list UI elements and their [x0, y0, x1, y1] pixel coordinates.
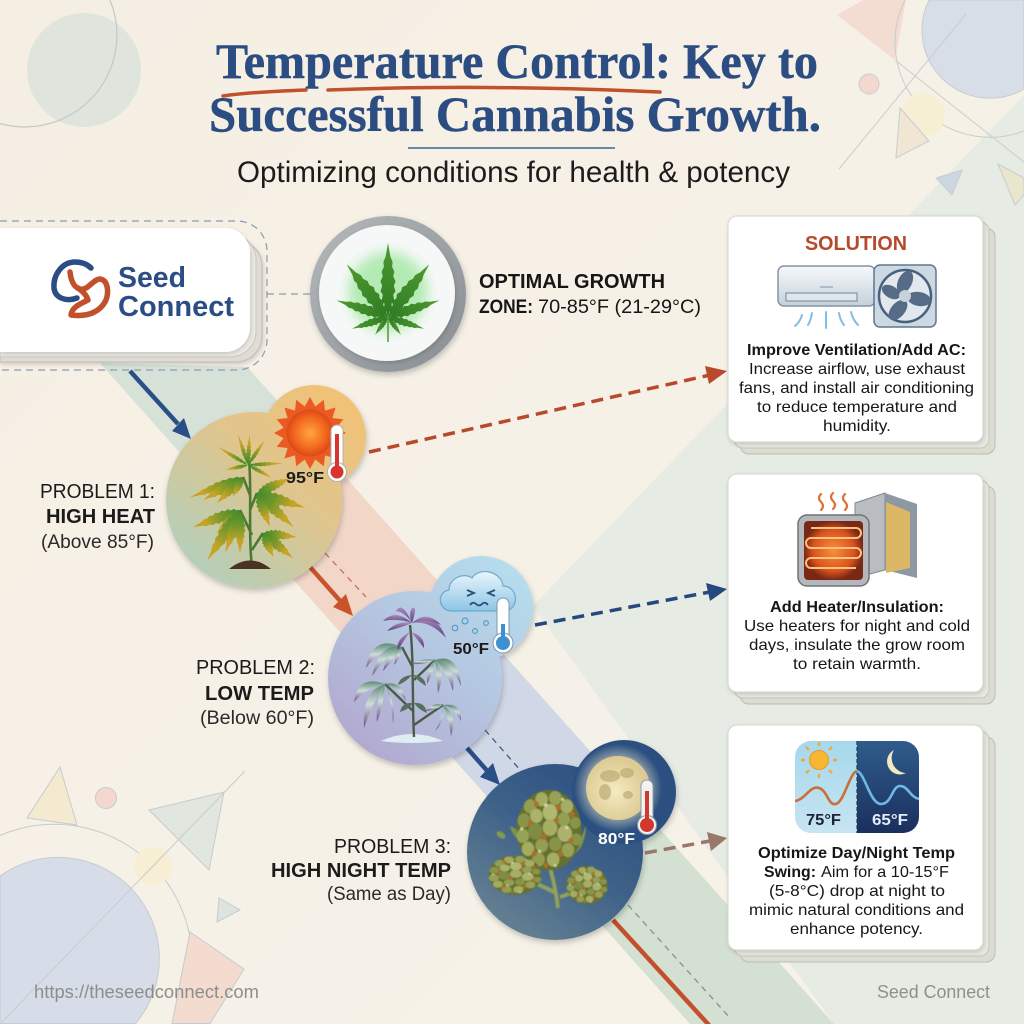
solution 1 text: Improve Ventilation/Add AC: [747, 342, 966, 359]
solution heading: SOLUTION [805, 233, 907, 255]
solution 3 text: (5-8°C) drop at night to [769, 883, 945, 900]
solution 3 text: Aim for a 10-15°F [821, 864, 949, 881]
optimal growth text: ZONE: [479, 297, 533, 318]
problem 2 label: LOW TEMP [205, 682, 314, 705]
solution 3 text: mimic natural conditions and [749, 902, 964, 919]
solution card 3 [728, 725, 995, 962]
icon: thermometer cold [493, 598, 513, 653]
optimal growth text: 70-85°F (21-29°C) [538, 297, 701, 318]
icon: thermometer night [638, 780, 656, 834]
problem 3 label [271, 835, 451, 905]
decorative shapes: top left [0, 0, 141, 127]
temperature reading 50F: 50°F [453, 641, 489, 658]
icon: crying cloud [440, 572, 515, 633]
solution 2 text: to retain warmth. [793, 656, 921, 673]
solution card 1 [728, 216, 995, 454]
problem 2 label: PROBLEM 2: [196, 656, 315, 679]
dashed connector lines on band [325, 553, 731, 1019]
solution 2 text [744, 599, 970, 673]
arrow: problem 1 to problem 2 [310, 567, 353, 616]
problem 3 illustration [467, 740, 676, 940]
subtitle: Optimizing conditions for health & potency [237, 156, 790, 189]
optimal growth badge [310, 216, 466, 372]
pale green background field [533, 95, 1024, 1024]
icon: heater [798, 493, 869, 586]
icon: frosted plant [354, 607, 461, 743]
title: Successful Cannabis Growth. [209, 86, 821, 142]
solution 3 text [749, 845, 964, 938]
logo panel [0, 221, 267, 370]
dashed arrow: low temp to heater [535, 583, 727, 625]
title [209, 33, 821, 148]
icon: exhaust fan [874, 265, 936, 327]
logo wordmark: Seed [118, 262, 186, 294]
solution 2 text: Use heaters for night and cold [744, 618, 970, 635]
problem 3 label: HIGH NIGHT TEMP [271, 859, 451, 882]
problem 1 illustration [166, 385, 366, 588]
solution card 2 [728, 474, 995, 704]
problem 3 label: PROBLEM 3: [334, 835, 451, 858]
diagonal flow band [100, 363, 834, 1024]
temperature reading 95F: 95°F [286, 470, 324, 487]
icon: thermometer hot [328, 425, 346, 482]
solution 3 text: Swing: [764, 864, 816, 881]
problem 1 label: HIGH HEAT [46, 505, 155, 528]
decorative shapes: top right [837, 0, 1024, 205]
logo wordmark [118, 262, 234, 323]
icon: day night chart [795, 741, 919, 833]
arrow: trailing line [611, 918, 711, 1024]
solution 1 text [739, 342, 974, 435]
optimal growth text: OPTIMAL GROWTH [479, 270, 665, 293]
problem 3 label: (Same as Day) [327, 883, 451, 905]
icon: day night chart: 65°F [872, 812, 908, 829]
icon: cannabis buds [489, 790, 607, 908]
problem 2 label [196, 656, 315, 729]
title: Temperature Control: Key to [216, 33, 818, 89]
problem 2 illustration [328, 556, 533, 765]
solution 2 text: Add Heater/Insulation: [770, 599, 944, 616]
icon: glowing cannabis leaf [335, 243, 441, 342]
icon: air conditioner [778, 266, 875, 328]
problem 1 label [40, 480, 155, 553]
logo wordmark: Connect [118, 291, 234, 323]
decorative shapes: bottom left [0, 767, 245, 1024]
arrow: logo to problem 1 [130, 371, 191, 439]
icon: moon [574, 744, 662, 832]
icon: sun [274, 397, 346, 469]
optimal growth text [479, 270, 701, 318]
problem 1 label: (Above 85°F) [41, 531, 154, 553]
temperature reading 80F: 80°F [598, 831, 635, 848]
dashed arrow: heat to solution [369, 366, 727, 452]
footer url: https://theseedconnect.com [34, 982, 259, 1002]
solution 3 text: Optimize Day/Night Temp [758, 845, 955, 862]
solution 1 text: to reduce temperature and [757, 399, 957, 416]
icon: day night chart: 75°F [806, 812, 841, 829]
solution 2 text: days, insulate the grow room [749, 637, 965, 654]
solution 1 text: fans, and install air conditioning [739, 380, 974, 397]
problem 2 label: (Below 60°F) [200, 707, 314, 729]
icon: wilting plant [188, 434, 307, 569]
problem 1 label: PROBLEM 1: [40, 480, 155, 503]
solution 3 text: enhance potency. [790, 921, 923, 938]
dashed arrow: night temp to day/night swing [645, 832, 727, 853]
icon: seed connect logo mark [54, 262, 108, 315]
solution 1 text: humidity. [823, 418, 891, 435]
arrow: problem 2 to problem 3 [467, 748, 500, 785]
solution 1 text: Increase airflow, use exhaust [749, 361, 966, 378]
footer brand: Seed Connect [877, 981, 990, 1002]
icon: insulation panels [855, 493, 917, 578]
